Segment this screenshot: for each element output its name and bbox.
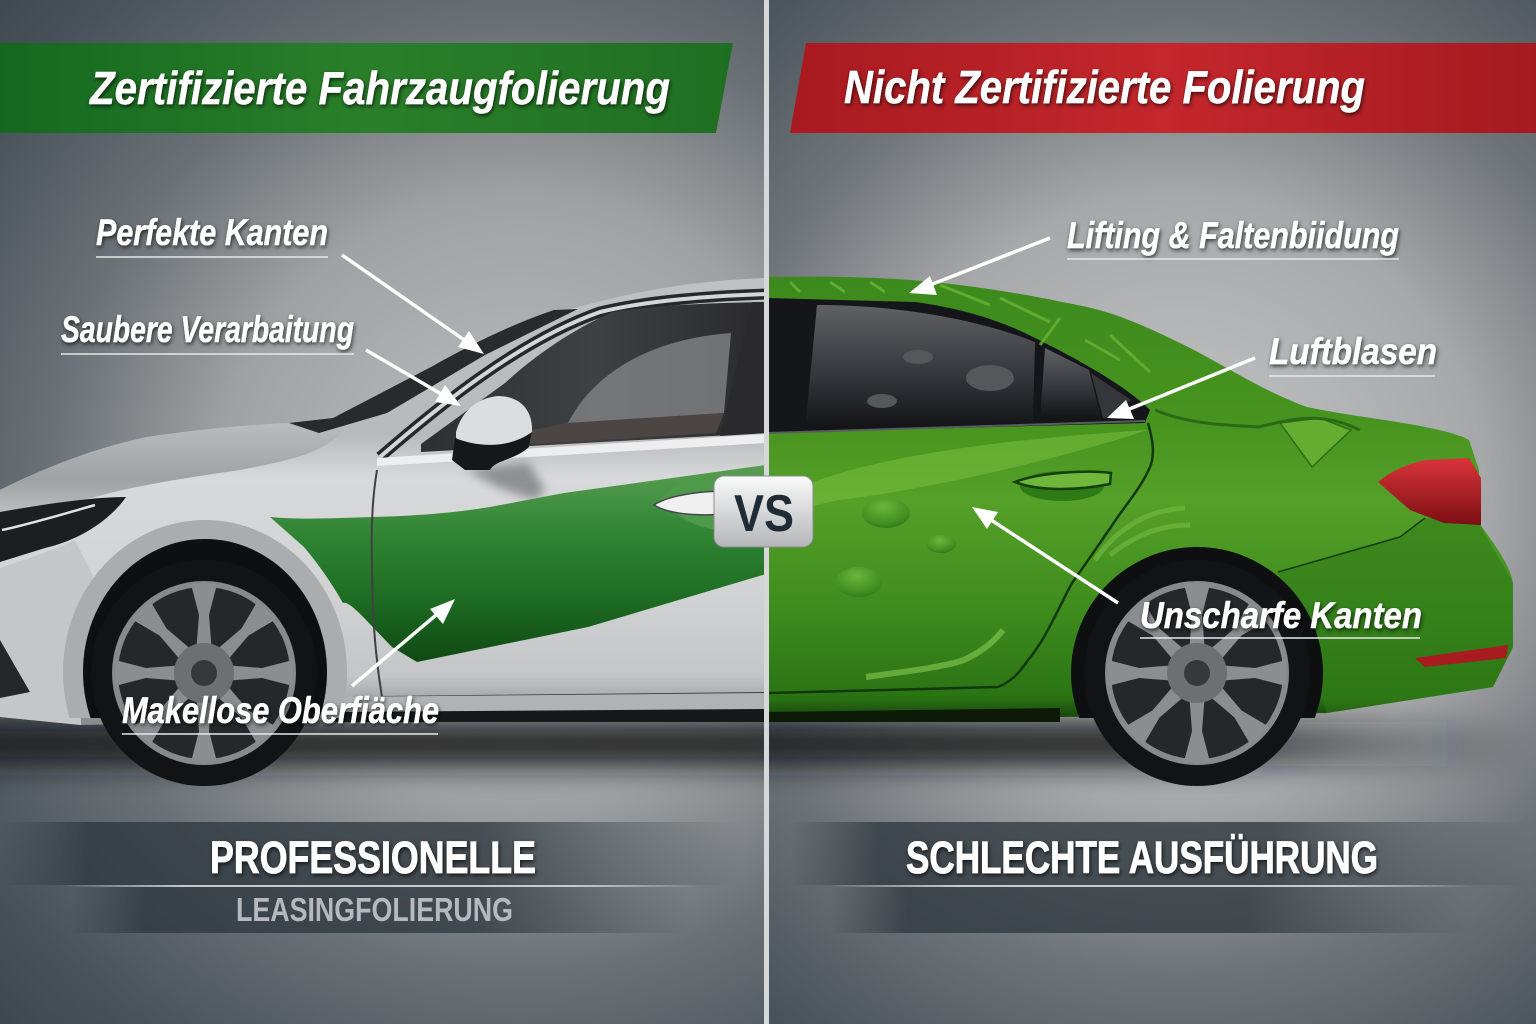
wheel arch wrinkles	[1095, 508, 1190, 560]
wrinkled edge	[1155, 410, 1360, 430]
mirror base	[452, 432, 532, 470]
front wheel	[91, 560, 317, 786]
rear wheel arch opening	[1071, 547, 1323, 718]
mirror	[456, 396, 532, 452]
hood shading	[0, 423, 345, 518]
left caption band	[0, 822, 740, 933]
window bubbles	[867, 350, 1014, 408]
label: Luftblasen: Luftblasen	[1269, 331, 1437, 372]
rear lower shading	[1278, 518, 1513, 713]
front grille	[0, 640, 30, 698]
front bumper	[0, 540, 100, 725]
left caption title: PROFESSIONELLE	[210, 832, 536, 883]
car body	[768, 277, 1513, 720]
window frame	[768, 298, 1150, 433]
left banner	[0, 43, 733, 133]
rear quarter seam	[1278, 518, 1425, 572]
left banner heading: Zertifizierte Fahrzaugfolierung	[88, 62, 670, 114]
roof wrinkles	[790, 282, 1150, 372]
B-pillar	[720, 302, 766, 436]
door handle	[654, 492, 730, 515]
lower door wrinkles	[866, 630, 1003, 677]
rear wheel	[1084, 560, 1310, 786]
ground shadow	[0, 722, 1536, 766]
right banner heading: Nicht Zertifizierte Folierung	[844, 61, 1365, 113]
headlight LED	[2, 505, 95, 530]
arrow: Perfekte Kanten	[342, 255, 484, 354]
window sill	[377, 434, 766, 466]
label: Lifting & Faltenbildung: Lifting & Faltenbiidung	[1067, 215, 1399, 256]
center divider	[764, 0, 769, 1024]
wrinkled wrap fold	[1280, 418, 1351, 467]
left silver car	[0, 278, 766, 824]
label: Perfekte Kanten: Perfekte Kanten	[96, 212, 328, 253]
taillight	[1378, 458, 1481, 525]
mirror shadow	[465, 462, 545, 500]
left caption subtitle: LEASINGFOLIERUNG	[236, 891, 513, 928]
right caption title: SCHLECHTE AUSFÜHRUNG	[906, 832, 1378, 883]
right green car	[768, 277, 1513, 799]
left background panel	[0, 0, 766, 1024]
door shine	[770, 430, 1148, 520]
arrow: Saubere Verarbeitung	[366, 350, 461, 406]
rear reflector	[1415, 645, 1508, 667]
underside	[768, 708, 1060, 722]
label: Makellose Oberfläche: Makellose Oberfiäche	[122, 690, 439, 731]
wheel arch opening	[83, 539, 327, 718]
wheel arch band	[63, 520, 347, 718]
label: Unscharfe Kanten: Unscharfe Kanten	[1140, 595, 1422, 636]
door handle cup	[1020, 471, 1104, 501]
arrow: Lifting	[909, 238, 1050, 295]
label: Saubere Verarbeitung: Saubere Verarbaitung	[61, 309, 354, 350]
quarter window	[1091, 373, 1131, 418]
rear side window	[1040, 348, 1101, 420]
door seam	[768, 423, 1153, 693]
door handle	[1015, 472, 1111, 489]
side window	[421, 302, 766, 452]
front side window	[805, 305, 1035, 430]
headlight	[0, 497, 126, 562]
rocker underside	[330, 709, 766, 722]
right background panel	[766, 0, 1536, 1024]
arrow: Luftblasen	[1107, 358, 1255, 419]
windshield	[289, 309, 578, 433]
car body	[0, 278, 766, 725]
window frame chrome	[380, 294, 766, 457]
green wrap patch	[270, 465, 766, 662]
window sill	[768, 421, 1145, 433]
window highlight	[568, 333, 731, 423]
VS badge: VS	[734, 485, 794, 543]
arrow: Makellose Oberfläche	[352, 599, 455, 686]
door handle cup	[660, 476, 745, 529]
rocker panel	[330, 693, 766, 716]
right banner	[790, 43, 1536, 133]
surface bubbles	[836, 498, 956, 597]
arrow: Unscharfe Kanten	[972, 507, 1118, 603]
right caption band	[790, 822, 1530, 933]
door seams	[372, 470, 766, 697]
window frame	[380, 294, 766, 457]
VS badge	[714, 476, 813, 547]
window lower tint	[500, 413, 724, 446]
